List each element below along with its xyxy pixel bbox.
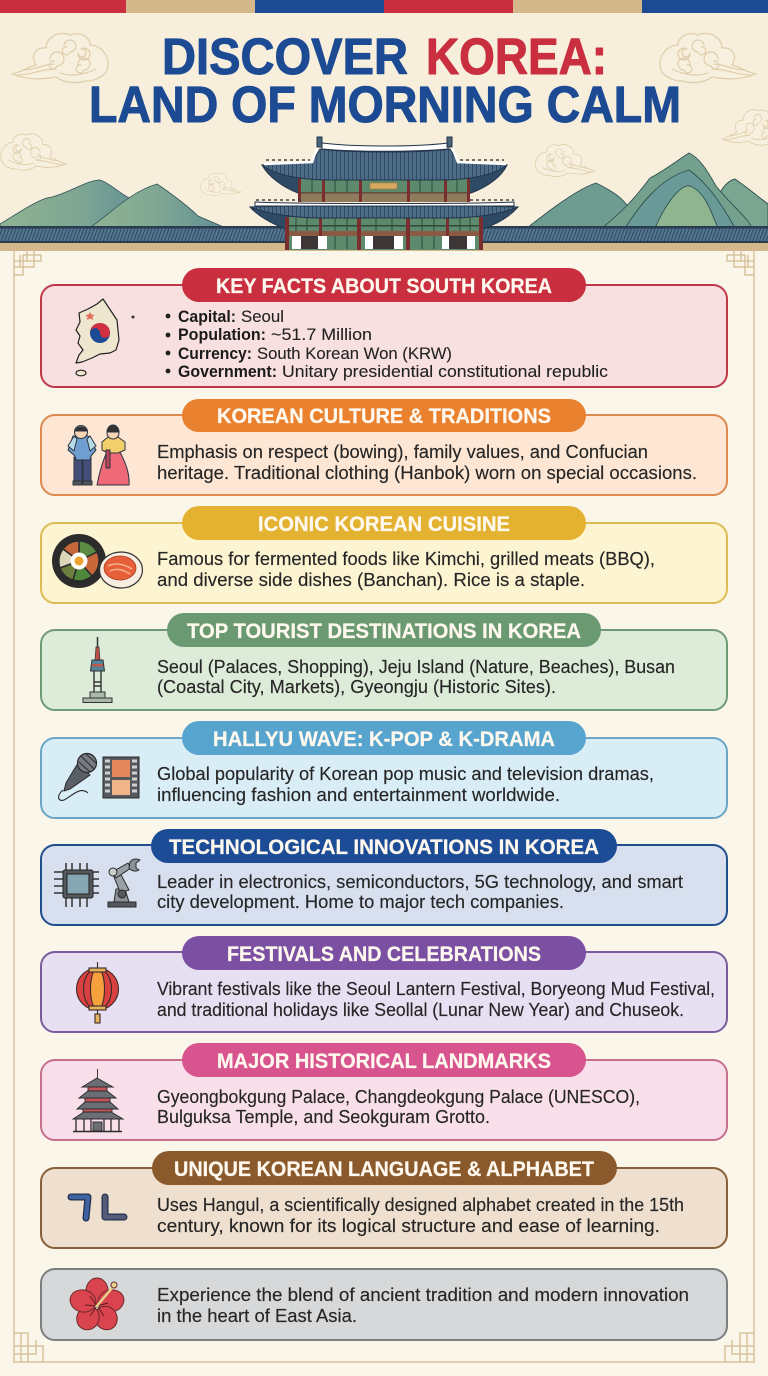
- heading: language: UNIQUE KOREAN LANGUAGE & ALPHABET: [174, 1158, 594, 1181]
- header banner: [0, 0, 768, 251]
- icon: microphone: [59, 754, 96, 800]
- panel: landmarks: [41, 1043, 727, 1140]
- text: hallyu wave: Global popularity of Korean pop music and television dramas,: [157, 764, 654, 784]
- text: landmarks: Bulguksa Temple, and Seokguram Grotto.: [157, 1107, 490, 1127]
- lower roof underside: [250, 207, 518, 229]
- icon: bibimbap and kimchi: [52, 534, 142, 588]
- text: language: [157, 1195, 684, 1236]
- text: hallyu wave: [157, 764, 654, 805]
- panel: key facts: [41, 268, 727, 387]
- heading: culture: [182, 399, 586, 432]
- upper roof underside: [262, 165, 507, 193]
- text: key facts list: Seoul: [241, 307, 284, 326]
- heading: landmarks: MAJOR HISTORICAL LANDMARKS: [217, 1050, 551, 1073]
- icon: film strip: [103, 757, 139, 798]
- heading: language: [152, 1151, 617, 1185]
- text: cuisine: and diverse side dishes (Banchan). Rice is a staple.: [157, 570, 585, 590]
- text: key facts list: Capital:: [178, 307, 236, 326]
- text: closing message: in the heart of East Asia.: [157, 1306, 357, 1326]
- text: language: Uses Hangul, a scientifically designed alphabet created in the 15th: [157, 1195, 684, 1215]
- panel: tourist destinations: [41, 613, 727, 710]
- decorative frame: [14, 250, 754, 1362]
- text: technology: [157, 872, 683, 912]
- mountains left: [0, 180, 226, 228]
- heading: culture: KOREAN CULTURE & TRADITIONS: [217, 405, 551, 428]
- text: technology: city development. Home to major tech companies.: [157, 892, 564, 912]
- panel: culture: [41, 399, 727, 495]
- heading: technology: [151, 829, 617, 863]
- text: key facts list: Currency:: [178, 344, 252, 363]
- panel: language: [41, 1151, 727, 1248]
- upper floor: [298, 178, 470, 202]
- text: technology: Leader in electronics, semiconductors, 5G technology, and smart: [157, 872, 683, 892]
- text: tourist destinations: Seoul (Palaces, Shopping), Jeju Island (Nature, Beaches), Busan: [157, 657, 675, 677]
- icon: N Seoul Tower: [83, 637, 112, 702]
- text: culture: Emphasis on respect (bowing), family values, and Confucian: [157, 442, 648, 462]
- text: cuisine: Famous for fermented foods like Kimchi, grilled meats (BBQ),: [157, 549, 655, 569]
- icon: hangul letters: [71, 1197, 124, 1218]
- text: culture: [157, 442, 697, 483]
- icon: pagoda: [73, 1069, 123, 1132]
- icon: robot arm: [108, 859, 140, 907]
- palace: [250, 137, 518, 250]
- text: landmarks: [157, 1087, 640, 1127]
- icon: lantern: [76, 962, 118, 1023]
- panel: cuisine: [41, 506, 727, 603]
- text: festivals: and traditional holidays like Seollal (Lunar New Year) and Chuseok.: [157, 1000, 684, 1020]
- heading: technology: TECHNOLOGICAL INNOVATIONS IN KOREA: [169, 836, 599, 859]
- palace wall: [0, 226, 768, 251]
- mountains right: [527, 153, 768, 228]
- heading: landmarks: [182, 1043, 586, 1077]
- title: [89, 28, 681, 133]
- heading: tourist destinations: [167, 613, 601, 647]
- decorative clouds: [1, 33, 768, 196]
- text: tourist destinations: [157, 657, 675, 697]
- heading: key facts: KEY FACTS ABOUT SOUTH KOREA: [216, 275, 552, 298]
- text: key facts list: ~51.7 Million: [271, 325, 372, 344]
- text: closing message: Experience the blend of ancient tradition and modern innovation: [157, 1285, 689, 1305]
- title: DISCOVER: [162, 28, 408, 85]
- text: key facts list: Unitary presidential constitutional republic: [282, 362, 609, 381]
- heading: festivals: FESTIVALS AND CELEBRATIONS: [227, 943, 541, 966]
- title: LAND OF MORNING CALM: [89, 76, 681, 133]
- top colour stripe: [0, 0, 768, 13]
- icon: South Korea map: [76, 299, 134, 376]
- icon: microchip: [54, 863, 99, 907]
- icon: couple in hanbok: [68, 425, 129, 485]
- text: closing message: [157, 1285, 689, 1326]
- title: KOREA:: [426, 28, 607, 85]
- panel: hallyu wave: [41, 721, 727, 818]
- text: language: century, known for its logical structure and ease of learning.: [157, 1216, 660, 1236]
- heading: tourist destinations: TOP TOURIST DESTINATIONS IN KOREA: [187, 620, 581, 643]
- text: key facts list: Government:: [178, 362, 277, 381]
- heading: hallyu wave: [182, 721, 586, 755]
- text: cuisine: [157, 549, 655, 590]
- panel: festivals: [41, 936, 727, 1032]
- icon: hibiscus flower: [68, 1278, 126, 1334]
- text: key facts list: Population:: [178, 325, 266, 344]
- upper roof: [262, 137, 507, 180]
- heading: cuisine: ICONIC KOREAN CUISINE: [258, 513, 510, 536]
- text: culture: heritage. Traditional clothing (Hanbok) worn on special occasions.: [157, 463, 697, 483]
- text: festivals: [157, 979, 715, 1020]
- text: landmarks: Gyeongbokgung Palace, Changdeokgung Palace (UNESCO),: [157, 1087, 640, 1107]
- panel: technology: [41, 829, 727, 925]
- panel: closing message: [41, 1269, 727, 1340]
- heading: festivals: [182, 936, 586, 970]
- heading: cuisine: [182, 506, 586, 540]
- text: key facts list: [166, 307, 609, 381]
- heading: key facts: [182, 268, 586, 302]
- lower roof: [250, 200, 518, 218]
- text: hallyu wave: influencing fashion and entertainment worldwide.: [157, 785, 560, 805]
- heading: hallyu wave: HALLYU WAVE: K-POP & K-DRAMA: [213, 728, 555, 751]
- text: key facts list: South Korean Won (KRW): [257, 344, 452, 363]
- lower floor: [285, 217, 483, 250]
- text: tourist destinations: (Coastal City, Markets), Gyeongju (Historic Sites).: [157, 677, 556, 697]
- text: festivals: Vibrant festivals like the Seoul Lantern Festival, Boryeong Mud Festival,: [157, 979, 715, 999]
